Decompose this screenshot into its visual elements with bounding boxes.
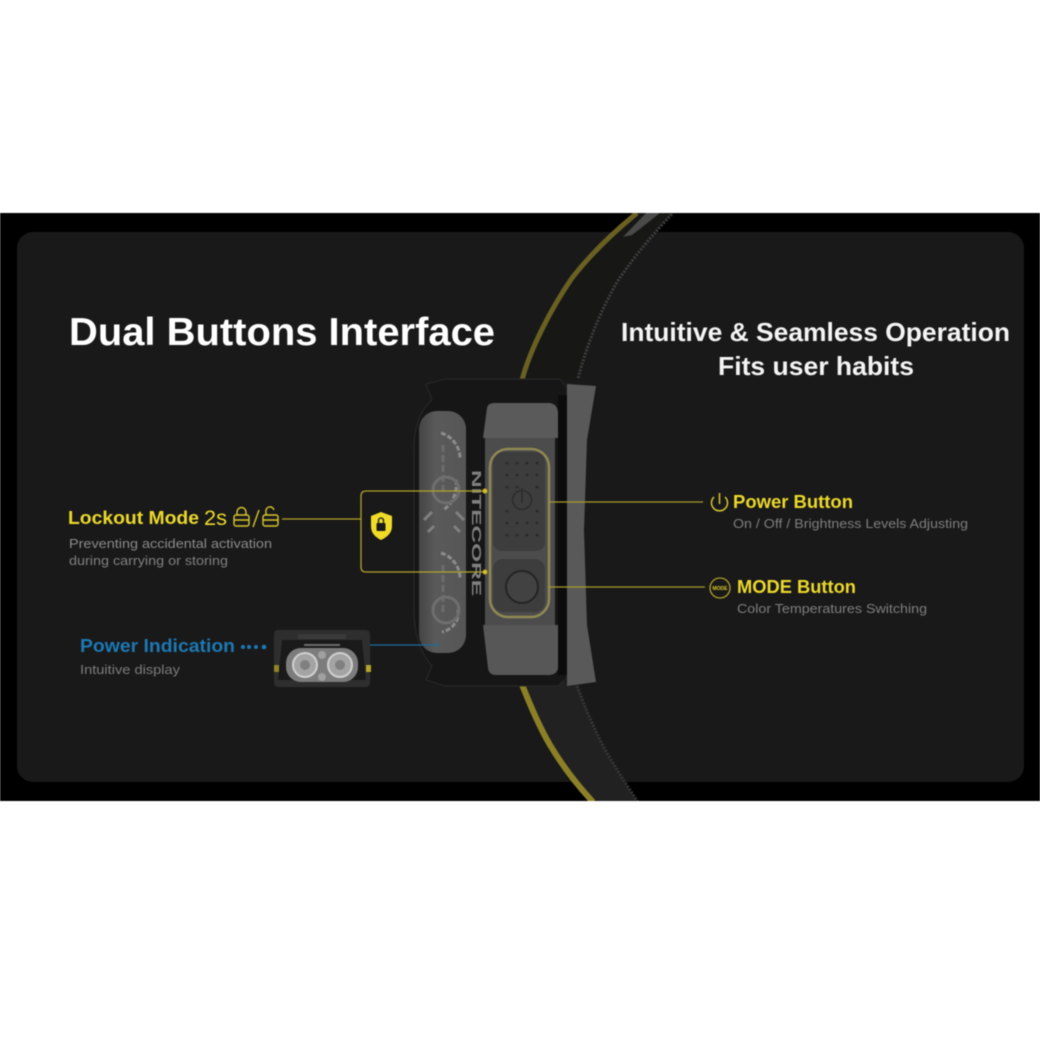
headband strap	[520, 213, 673, 802]
mode button	[493, 559, 545, 612]
subtitle: Fits user habits	[718, 351, 914, 381]
side body	[483, 403, 558, 438]
icon: mode: MODE	[712, 586, 728, 592]
subtitle	[621, 317, 1010, 381]
headlamp	[414, 379, 596, 686]
icon: power	[712, 493, 727, 511]
icon: shield lock	[371, 512, 392, 540]
callout: lockout mode: Lockout Mode	[68, 508, 199, 528]
callout: lockout mode: 2s	[204, 507, 227, 530]
power button	[493, 452, 545, 551]
callout: mode button: Color Temperatures Switching	[737, 601, 927, 616]
callout: lockout mode	[68, 507, 278, 568]
callout: mode button	[710, 577, 927, 616]
callout: power indication: Power Indication	[80, 636, 235, 656]
callout: lockout mode: during carrying or storing	[69, 553, 228, 568]
icon: mode	[710, 578, 730, 598]
callout: power indication: Intuitive display	[80, 662, 181, 677]
headlamp lens	[419, 411, 466, 653]
subtitle: Intuitive & Seamless Operation	[621, 317, 1010, 347]
callout: power button: Power Button	[733, 492, 853, 512]
yellow button outline	[490, 449, 549, 617]
panel: main card	[17, 232, 1024, 782]
icon: locks	[234, 507, 278, 527]
brand text: NITECORE	[469, 470, 484, 597]
callout: power button: On / Off / Brightness Levels Adjusting	[733, 516, 968, 531]
title: Dual Buttons Interface	[69, 311, 495, 354]
callout: lockout mode: Preventing accidental activation	[69, 536, 272, 551]
headlamp front thumbnail	[274, 630, 371, 687]
power connector lines	[549, 502, 705, 587]
background band	[0, 213, 1040, 801]
icon: indicator dots	[241, 645, 266, 649]
rear mount	[567, 384, 596, 686]
power indication connector	[370, 644, 440, 646]
lens reflector bottom	[433, 553, 460, 632]
lockout connector	[282, 489, 487, 574]
lens reflector top	[424, 433, 464, 532]
callout: mode button: MODE Button	[737, 577, 856, 597]
headlamp housing	[414, 379, 567, 686]
callout: power button	[712, 492, 968, 531]
callout: power indication	[80, 636, 266, 677]
